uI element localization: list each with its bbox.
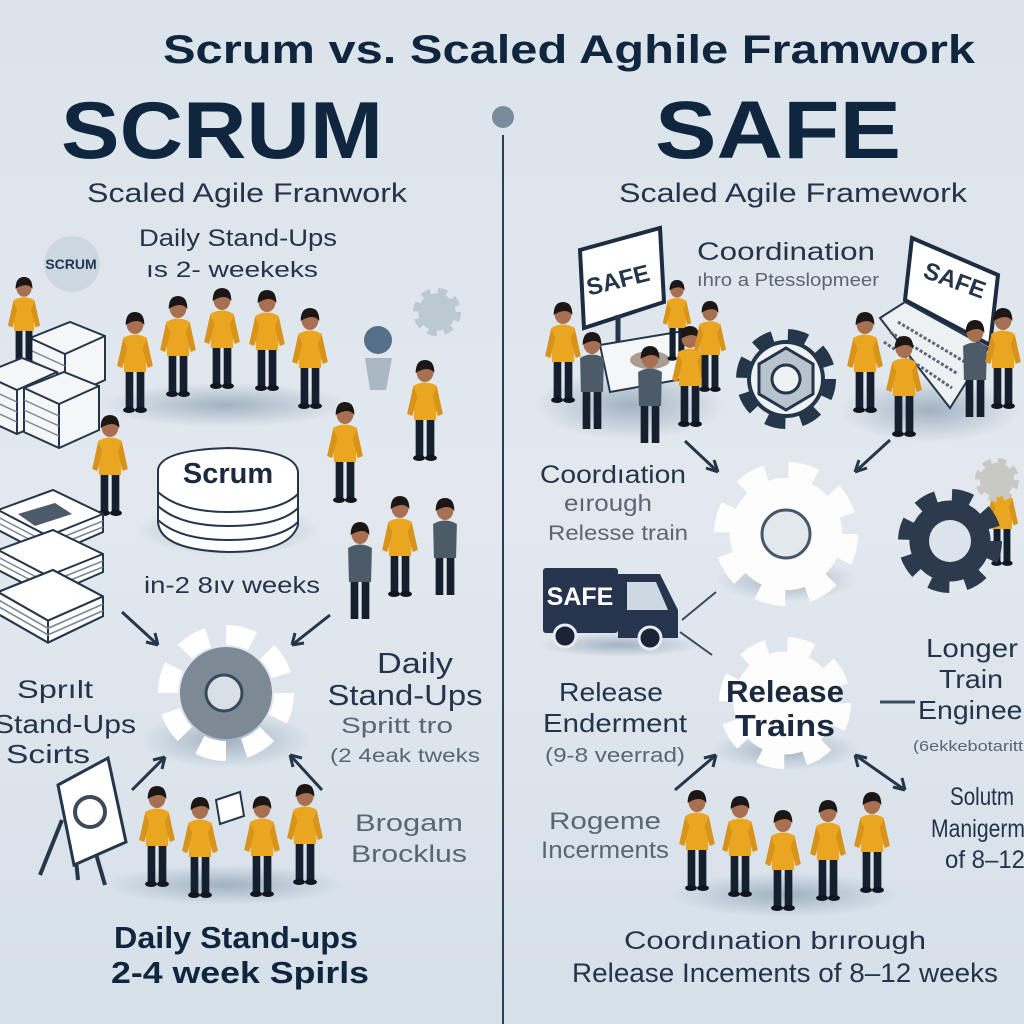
text: release enderment: Enderment: [543, 708, 688, 738]
text: program increments: Rogeme: [549, 808, 661, 835]
arrow: to train engineer: [880, 700, 915, 704]
text: scrum summary: Daily Stand-ups: [114, 920, 358, 955]
people: top circle: [100, 288, 350, 427]
subheading: safe: Scaled Agile Framework: [619, 178, 968, 208]
arrow: up right bottom left: [132, 757, 165, 790]
arrow: to scrum gear right: [292, 615, 330, 645]
person: seated with boxes: [0, 277, 105, 448]
text: coordination through release train: [540, 461, 688, 545]
panel: safe: [535, 85, 1024, 988]
icon: safe top gear: [742, 336, 830, 422]
group: safe laptop team: [840, 238, 1021, 442]
text: longer train engineer: Longer: [926, 633, 1018, 663]
icon: white gear: [716, 471, 856, 602]
icon: scrum cloud: SCRUM: [45, 256, 97, 272]
icon: scrum database: [138, 448, 318, 556]
text: program backlogs: Brogam: [355, 810, 463, 837]
arrow: to white gear right: [855, 440, 890, 472]
text: daily stand-ups right: Spritt tro: [341, 713, 453, 738]
text: program increments: [541, 808, 669, 864]
centre divider: [492, 106, 514, 1024]
text: sprint left: Sprılt: [17, 676, 93, 704]
text: program backlogs: [351, 810, 467, 868]
text: coordination top: Coordination: [697, 238, 875, 266]
group: safe board team: [535, 228, 726, 443]
group: safe laptop team: SAFE: [920, 257, 989, 305]
text: safe summary: Coordınation brırough: [624, 927, 926, 955]
heading: scrum: SCRUM: [61, 86, 383, 176]
subheading: scrum: Scaled Agile Franwork: [87, 178, 408, 208]
icon: scrum database: Scrum: [183, 458, 273, 490]
text: coordination through release train: Coordıation: [540, 461, 686, 489]
icon: release trains badge: Trains: [735, 708, 835, 743]
arrow: up right to badge: [675, 755, 716, 790]
icon: safe truck: [540, 568, 700, 657]
icon: scrum cloud: [44, 236, 100, 292]
text: release enderment: [543, 677, 688, 767]
text: coordination through release train: eırough: [564, 490, 652, 516]
arrow: truck connector upper: [682, 592, 716, 620]
text: coordination top: [697, 238, 879, 290]
text: solution management: [931, 783, 1024, 874]
text: in 2-4 weeks: in-2 8ıv weeks: [144, 572, 320, 598]
text: daily stand-ups right: Stand-Ups: [328, 680, 482, 712]
text: scrum summary: [111, 920, 369, 990]
text: safe summary: Release Incements of 8–12 weeks: [572, 958, 998, 988]
text: coordination through release train: Relesse train: [548, 522, 688, 545]
people: safe bottom group: [670, 790, 900, 917]
text: program increments: Incerments: [541, 837, 669, 864]
text: daily stand-ups right: Daily: [377, 648, 454, 680]
icon: dark gear with person: [905, 461, 1018, 586]
text: daily stand-ups right: [328, 648, 482, 767]
text: safe summary: [572, 927, 998, 988]
icon: faint gear top: [416, 291, 458, 333]
heading: safe: SAFE: [655, 85, 901, 176]
text: longer train engineer: (6ekkebotaritt: [913, 738, 1024, 755]
icon: release trains badge: Release: [726, 674, 844, 709]
text: release enderment: Release: [559, 677, 663, 707]
arrow: two-way to solution: [855, 755, 905, 790]
text: scrum summary: 2-4 week Spirls: [111, 955, 369, 990]
text: longer train engineer: Engineer: [918, 695, 1024, 725]
text: sprint left: [0, 676, 136, 769]
icon: release trains badge: [710, 646, 860, 770]
text: 2 week sprints top: ıs 2- weekeks: [146, 257, 318, 282]
text: release enderment: (9-8 veerrad): [545, 745, 685, 767]
text: coordination top: ıhro a Ptesslopmeer: [697, 270, 879, 290]
people: side figures: [92, 360, 457, 619]
text: daily stand-ups top: Daily Stand-Ups: [139, 225, 337, 252]
arrow: up left bottom right: [290, 755, 322, 790]
text: longer train engineer: Train: [939, 664, 1003, 694]
text: daily stand-ups right: (2 4eak tweks: [330, 746, 480, 767]
people: bottom group: [105, 784, 345, 905]
icon: flip board: [40, 758, 126, 885]
title: Scrum vs. Scaled Aghile Framwork: [163, 28, 976, 72]
text: longer train engineer: [913, 633, 1024, 755]
text: sprint left: Scirts: [6, 739, 90, 769]
icon: safe truck: SAFE: [547, 583, 613, 611]
group: safe board team: SAFE: [584, 260, 653, 302]
text: program backlogs: Brocklus: [351, 841, 467, 868]
panel: scrum: [0, 86, 482, 990]
icon: document stack: [0, 490, 103, 643]
arrow: truck connector lower: [680, 632, 712, 655]
arrow: to white gear left: [685, 441, 718, 472]
icon: small figure: [364, 326, 392, 390]
arrow: to scrum gear left: [122, 612, 158, 645]
icon: scrum gear: [141, 635, 311, 768]
